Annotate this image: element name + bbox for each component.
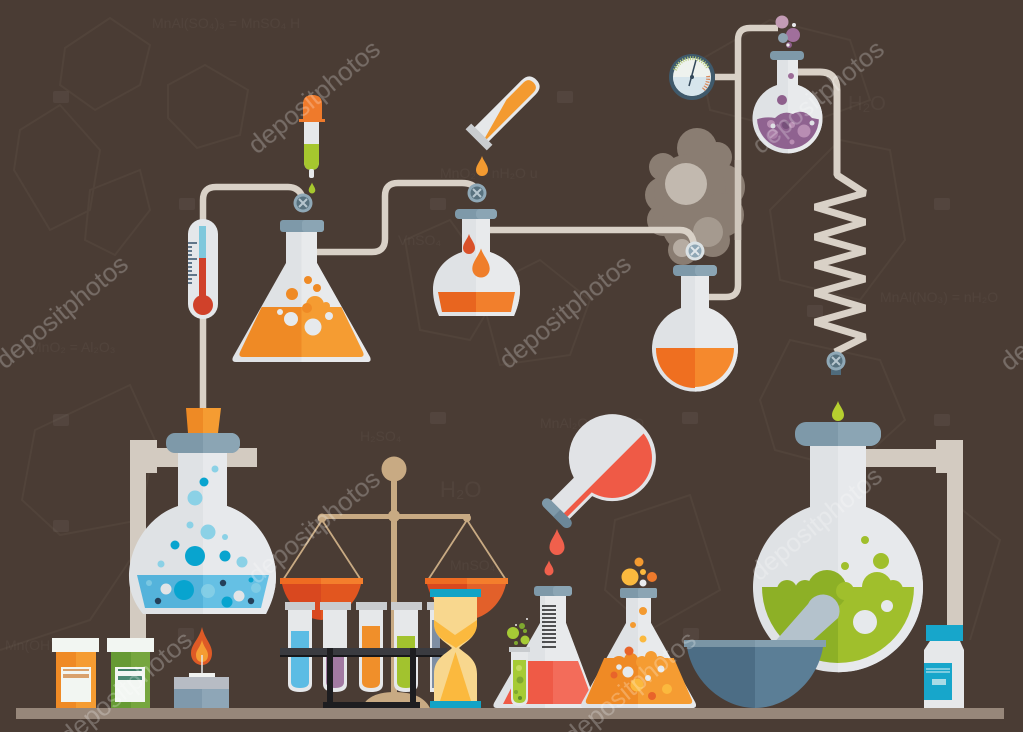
- background formula text: H₂O: [848, 93, 886, 115]
- hourglass: [430, 589, 481, 708]
- small green test tube: [507, 618, 530, 706]
- candle burner: [174, 627, 229, 708]
- conical flask: red: [493, 586, 597, 708]
- background formula text: H₂O: [440, 477, 482, 502]
- background camera icons: [53, 91, 950, 640]
- large blue flask: [129, 453, 276, 614]
- background formula text: MnAl₂O₃ = nH₂O: [540, 415, 644, 431]
- valve 2: [468, 184, 486, 202]
- connecting pipes behind smoke: [709, 28, 778, 297]
- orange drop: [476, 156, 488, 176]
- background formula text: MnSO₄: [450, 557, 496, 573]
- valve 1: [294, 194, 312, 212]
- red drops: [544, 529, 564, 576]
- conical flask: orange: [232, 220, 371, 362]
- balance scale: [280, 456, 508, 708]
- background formula text: MnO₂ = nH₂O u: [440, 165, 538, 181]
- watermark: depositphotos: [744, 460, 888, 587]
- watermark: depositphotos: [242, 463, 386, 590]
- large green flask: [753, 422, 923, 672]
- test tube slate: [427, 602, 441, 692]
- dropper: [299, 95, 325, 194]
- mortar bowl: [684, 640, 826, 708]
- test tube rack: [280, 648, 447, 708]
- tilted pouring flask: [523, 396, 674, 547]
- background formula text: MnO₂ = Al₂O₃: [30, 339, 115, 355]
- test tube orange: [356, 602, 387, 692]
- right retort stand: [866, 440, 963, 625]
- green drop: [832, 401, 844, 421]
- test tube blue: [285, 602, 315, 692]
- background formula text: MnAl(SO₄)₃ = MnSO₄ H: [152, 15, 300, 31]
- background formula text: Mn(OH)₂: [5, 637, 60, 653]
- small medicine vial: [924, 625, 964, 708]
- connecting pipes: [203, 72, 865, 410]
- valve 3: [686, 242, 704, 260]
- green medicine bottle: [107, 638, 154, 708]
- thermometer: [188, 219, 218, 319]
- background formula text: MnAl(NO₃) = nH₂O: [880, 289, 998, 305]
- shelf: [16, 708, 1004, 719]
- conical flask: orange bubbling: [580, 558, 698, 708]
- watermark: depositphotos: [746, 33, 890, 160]
- background formula text: VnSO₄: [398, 232, 441, 248]
- round flask: orange drops: [433, 209, 520, 316]
- watermark: depositphotos: [493, 248, 637, 375]
- test tube purple: [320, 602, 351, 692]
- orange medicine bottle: [52, 638, 99, 708]
- pressure gauge: [669, 54, 715, 100]
- round flask: orange liquid: [652, 265, 738, 392]
- left retort stand: [130, 440, 257, 640]
- background formula text: H₂SO₄: [360, 428, 402, 444]
- test tube green: [391, 602, 422, 692]
- valve 4 with outlet: [826, 352, 846, 375]
- round flask: purple: [752, 51, 822, 155]
- pestle: [772, 594, 840, 652]
- purple vapour bubbles: [776, 16, 800, 48]
- watermark: depositphotos: [242, 33, 386, 160]
- stopper and cork: [166, 408, 240, 453]
- smoke cloud: [645, 128, 745, 265]
- tilted test tube: [466, 69, 547, 150]
